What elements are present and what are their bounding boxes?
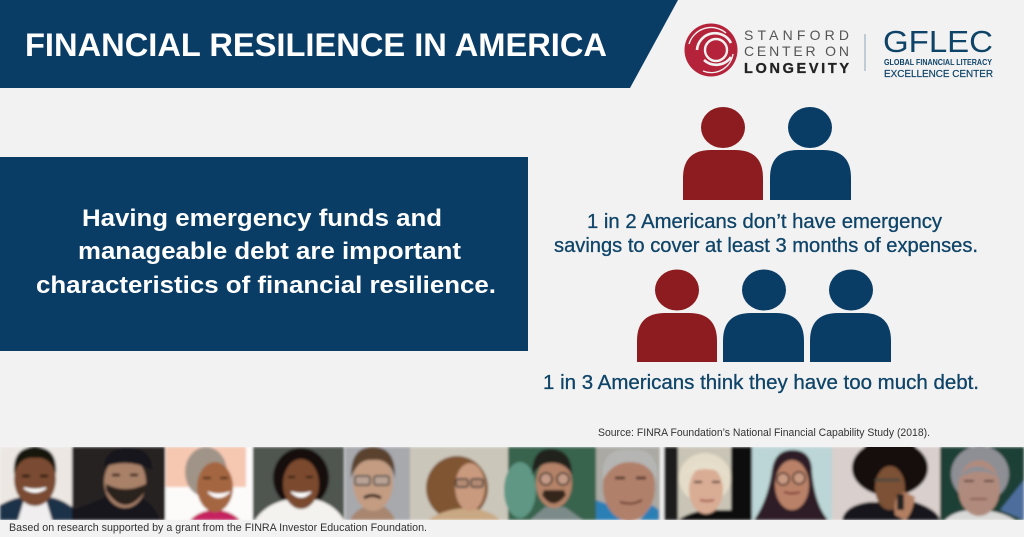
portrait 9 <box>664 447 752 520</box>
stat text: emergency savings: savings to cover at least 3 months of expenses. <box>554 235 978 257</box>
key message text: manageable debt are important <box>78 238 461 265</box>
portrait 11 <box>832 440 940 520</box>
key message text: characteristics of financial resilience. <box>36 272 496 299</box>
photo strip: portraits <box>0 440 1024 521</box>
portrait 8 <box>596 447 660 521</box>
key message text: Having emergency funds and <box>82 205 442 232</box>
portrait 6 <box>410 447 508 520</box>
logo: Stanford Center on Longevity <box>684 24 849 77</box>
stat text: emergency savings: 1 in 2 Americans don’t have emergency <box>587 211 942 233</box>
icon: red spiral <box>684 24 738 76</box>
title banner <box>0 0 678 88</box>
logo: GFLEC: EXCELLENCE CENTER <box>884 68 993 80</box>
stat text: emergency savings <box>554 211 978 257</box>
icon row: 1 in 3 people <box>637 270 891 362</box>
portrait 12 <box>940 446 1024 520</box>
logo: Stanford Center on Longevity: LONGEVITY <box>744 61 849 77</box>
key message text <box>36 205 496 299</box>
title: FINANCIAL RESILIENCE IN AMERICA <box>25 27 607 63</box>
source note: Source: FINRA Foundation’s National Financial Capability Study (2018). <box>598 427 930 439</box>
logo: GFLEC: GLOBAL FINANCIAL LITERACY <box>884 58 993 67</box>
portrait 1 <box>0 447 72 520</box>
portrait 4 <box>253 447 344 520</box>
stat text: too much debt: 1 in 3 Americans think they have too much debt. <box>543 372 979 394</box>
logo: Stanford Center on Longevity: STANFORD <box>744 27 849 43</box>
logo: GFLEC: GFLEC <box>883 24 993 59</box>
portrait 7 <box>504 447 596 520</box>
logo: Stanford Center on Longevity: CENTER ON <box>744 43 849 59</box>
panel: key message <box>0 157 528 351</box>
portrait 5 <box>345 447 410 520</box>
footer credit: Based on research supported by a grant from the FINRA Investor Education Foundation. <box>9 522 427 534</box>
portrait 2 <box>72 447 165 520</box>
portrait 10 <box>752 447 832 520</box>
icon row: 1 in 2 people <box>683 107 851 200</box>
portrait 3 <box>166 447 252 520</box>
logo: GFLEC <box>883 24 993 80</box>
